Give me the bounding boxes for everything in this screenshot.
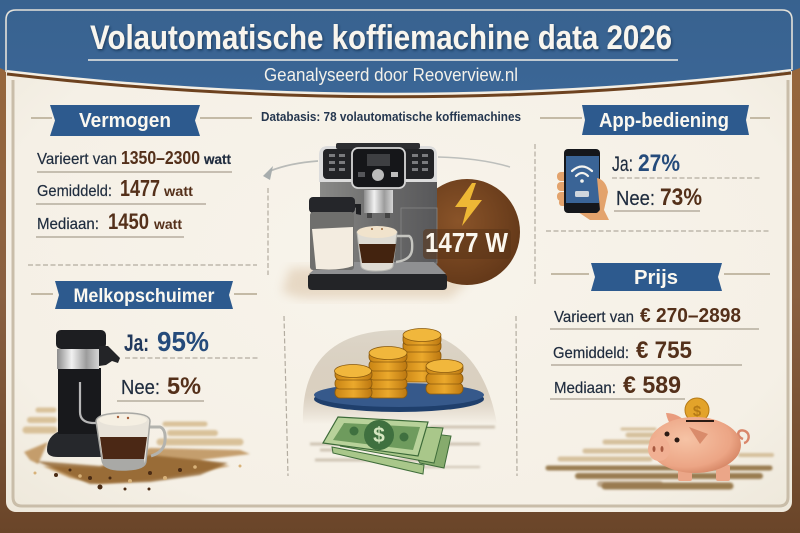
icon: espresso machine xyxy=(308,143,447,290)
row: yes: 95% xyxy=(157,326,209,357)
panel: app-bediening xyxy=(540,105,770,220)
coffee stain xyxy=(24,410,250,490)
panel: vermogen xyxy=(31,105,252,237)
row: range xyxy=(550,305,759,329)
row: average xyxy=(36,175,206,204)
icon: phone with wifi xyxy=(557,149,609,220)
row: range: € 270–2898 xyxy=(640,305,741,327)
row: median: 1450 xyxy=(108,209,149,234)
title: Volautomatische koffiemachine data 2026 xyxy=(90,19,672,57)
milk jug xyxy=(309,197,361,270)
header band xyxy=(0,0,800,97)
dataset note: Databasis: 78 volautomatische koffiemachines xyxy=(261,109,521,124)
row: yes: Ja: xyxy=(612,153,633,176)
arrow line: curve right xyxy=(438,157,510,167)
subtitle: Geanalyseerd door Reoverview.nl xyxy=(264,65,518,85)
coin stacks xyxy=(334,328,463,398)
arrow: curve left xyxy=(263,161,318,180)
latte cup xyxy=(357,226,412,271)
power value: 1477 W xyxy=(425,227,508,258)
icon: milk frother xyxy=(47,330,120,457)
row: median xyxy=(36,209,184,237)
section dividers xyxy=(28,144,769,476)
row: yes xyxy=(612,150,760,178)
row: yes xyxy=(124,326,260,358)
row: no: Nee: xyxy=(616,188,655,210)
heading ribbon: melkopschuimer: Melkopschuimer xyxy=(74,286,215,307)
row: yes: 27% xyxy=(638,150,680,177)
plate xyxy=(314,383,484,412)
wooden shadow xyxy=(282,268,468,298)
row: range: Varieert van xyxy=(37,151,117,168)
heading ribbon: prijs: Prijs xyxy=(634,267,678,289)
row: average: Gemiddeld: xyxy=(553,345,629,362)
panel: prijs xyxy=(548,263,772,486)
row: median: watt xyxy=(153,216,182,232)
icon: banknotes: $ xyxy=(373,424,385,447)
panel: machine hero xyxy=(263,143,520,298)
row: no: 5% xyxy=(167,373,201,400)
coin: $ xyxy=(693,403,702,420)
icon: banknotes xyxy=(323,417,451,474)
heading ribbon: vermogen xyxy=(50,105,200,136)
row: no xyxy=(614,184,702,211)
row: yes: Ja: xyxy=(124,330,149,357)
row: median: Mediaan: xyxy=(554,380,616,397)
coffee stain xyxy=(548,429,772,486)
panel: coins and cash xyxy=(303,328,497,474)
row: median: € 589 xyxy=(623,372,681,399)
heading ribbon: prijs xyxy=(591,263,722,291)
icon: piggy bank xyxy=(648,398,749,481)
row: range: Varieert van xyxy=(554,309,634,326)
heading ribbon: app-bediening xyxy=(582,105,749,135)
streak shadows xyxy=(310,427,495,467)
row: range: watt xyxy=(203,151,231,167)
row: range: 1350–2300 xyxy=(121,148,200,168)
row: average: watt xyxy=(163,183,193,199)
heading ribbon: app-bediening: App-bediening xyxy=(599,110,729,132)
power badge xyxy=(414,179,520,285)
row: average: € 755 xyxy=(636,337,692,364)
panel: melkopschuimer xyxy=(24,281,260,490)
row: range xyxy=(37,148,232,172)
row: no xyxy=(117,373,204,401)
row: median xyxy=(550,372,685,399)
row: no: Nee: xyxy=(121,377,160,399)
heading ribbon: vermogen: Vermogen xyxy=(79,110,171,132)
row: average xyxy=(551,337,742,365)
row: no: 73% xyxy=(660,184,702,211)
dome backdrop xyxy=(303,330,497,424)
row: average: Gemiddeld: xyxy=(37,183,112,200)
drip tray xyxy=(308,262,447,290)
heading ribbon: melkopschuimer xyxy=(55,281,233,309)
icon: latte glass xyxy=(96,413,165,470)
row: average: 1477 xyxy=(120,175,160,201)
row: median: Mediaan: xyxy=(37,216,99,233)
